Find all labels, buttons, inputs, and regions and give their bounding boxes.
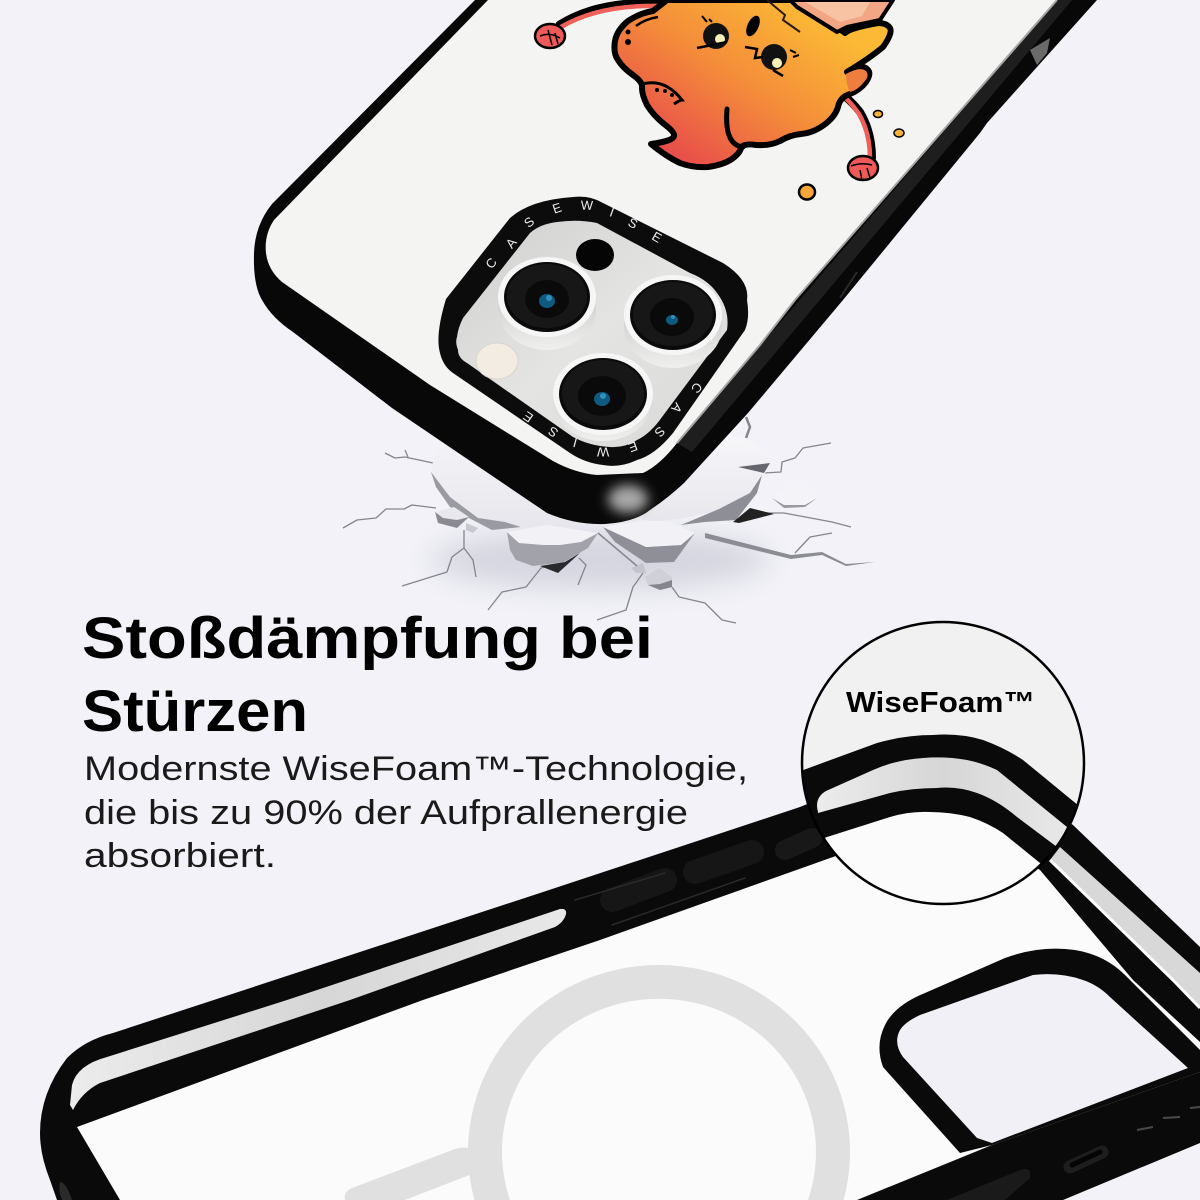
magsafe bar: [345, 1147, 479, 1200]
case back panel: [266, 0, 1057, 475]
camera cutout opening: [897, 974, 1188, 1143]
chunk centre left: [507, 525, 598, 573]
small bump behind arm: [846, 69, 868, 92]
cracked ground impact: [343, 410, 875, 623]
bumper inner band: [677, 0, 1072, 452]
small chunk right: [772, 485, 817, 508]
body line 1: Modernste WiseFoam™-Technologie,: [84, 750, 748, 788]
left fist: [535, 24, 565, 48]
body text: [84, 750, 748, 875]
body line 3: absorbiert.: [84, 837, 276, 875]
heading: [82, 606, 653, 744]
side button highlight: [1030, 38, 1050, 65]
box on head: [790, 0, 893, 32]
debris dots: [874, 110, 882, 118]
bumper highlight: [608, 485, 648, 513]
left foam strip: [70, 909, 566, 1110]
camera bump: [438, 197, 748, 466]
clear inner panel: [77, 815, 1200, 1200]
freckles: [625, 30, 674, 97]
outer black frame: [40, 745, 1200, 1200]
character illustration: [535, 0, 904, 200]
dark wedge: [738, 463, 770, 473]
magnified outer frame: [795, 735, 1090, 905]
silver camera plate: [456, 221, 728, 447]
heading line 1: Stoßdämpfung bei: [82, 606, 653, 671]
left arm: [560, 3, 663, 25]
lens upper left: [498, 257, 596, 350]
panel edge highlight: [677, 0, 1057, 443]
magnifier circle fill: [802, 622, 1084, 904]
right eye: [745, 44, 799, 76]
small chunks bottom: [598, 533, 672, 590]
top phone with case: [254, 0, 1097, 524]
bottom phone case: [40, 745, 1200, 1200]
dark crevice: [733, 508, 774, 523]
chunk centre right: [603, 520, 695, 563]
crater shading: [430, 530, 770, 590]
case black bumper: [254, 0, 1097, 524]
magsafe ring: [468, 965, 850, 1200]
flash: [476, 343, 518, 379]
main wedge crack: [705, 533, 875, 566]
body fold: [727, 109, 743, 147]
right fist: [848, 156, 878, 180]
lens right: [624, 275, 722, 368]
magnified WiseFoam detail: [795, 735, 1090, 905]
foam edge line: [1050, 860, 1200, 1008]
crack lines: [343, 417, 851, 623]
bottom ports: [59, 1107, 1200, 1200]
right arm: [829, 87, 872, 158]
camera cutout frame: [879, 949, 1200, 1153]
nose: [743, 14, 763, 38]
magnified foam strip: [817, 757, 1067, 847]
brand text bottom: CASEWISE: [520, 379, 706, 459]
small chunk left: [435, 507, 478, 533]
rock plate right: [640, 430, 770, 523]
left eye: [697, 16, 729, 49]
lens bottom: [553, 353, 653, 441]
crack on face: [767, 0, 800, 32]
volume buttons: [575, 838, 812, 925]
right foam strip: [1050, 847, 1200, 1008]
left plate wall: [431, 472, 521, 530]
magnifier circle outline: [802, 622, 1084, 904]
lidar sensor: [576, 239, 614, 271]
magnified clear panel: [825, 812, 1040, 903]
camera ring: [438, 197, 748, 466]
brand text top: CASEWISE: [482, 198, 665, 271]
right plate wall: [681, 475, 762, 525]
magnifier label: WiseFoam™: [846, 687, 1035, 719]
blob body: [614, 0, 891, 167]
rock plate left: [431, 410, 640, 530]
side button mark: [840, 272, 857, 298]
body line 2: die bis zu 90% der Aufprallenergie: [84, 794, 688, 832]
heading line 2: Stürzen: [82, 679, 308, 744]
